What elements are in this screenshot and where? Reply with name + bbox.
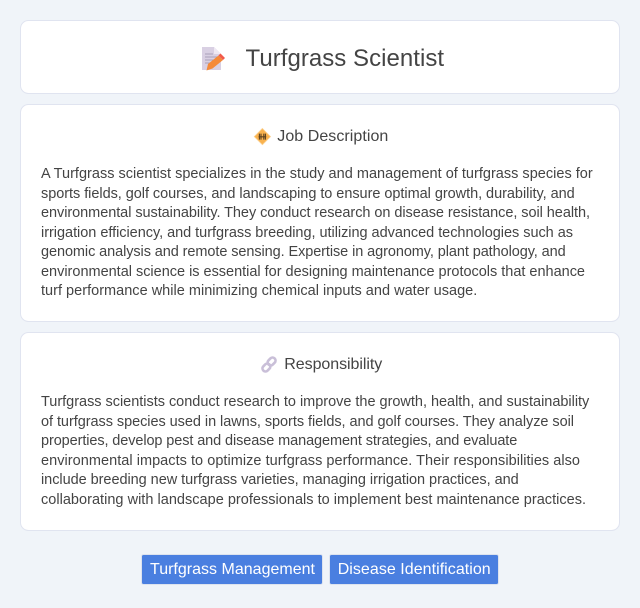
text block: responsibility: collaborating with landscape professionals to implement best maintenance practices. — [41, 492, 586, 508]
heading: job description: Job Description — [277, 128, 388, 145]
icon: diamond road sign — [254, 128, 270, 145]
text block: responsibility: properties, develop pest and disease management strategies, and evaluate — [41, 433, 517, 449]
title: Turfgrass Scientist — [246, 45, 444, 72]
text block: responsibility — [41, 394, 590, 508]
text block: responsibility: environmental impacts to optimize turfgrass performance. Their responsibilities also — [41, 453, 580, 469]
tag: turfgrass management: Turfgrass Management — [150, 561, 316, 578]
text block: job description: irrigation efficiency, and turfgrass breeding, utilizing advanced technologies such as — [41, 225, 573, 241]
tag: disease identification — [330, 554, 498, 584]
text block: job description: genomic analysis and remote sensing. Expertise in agronomy, plant pathology, and — [41, 244, 566, 260]
heading: responsibility: Responsibility — [284, 356, 382, 373]
text block: job description — [41, 166, 593, 299]
text block: job description: A Turfgrass scientist specializes in the study and management of turfgrass species for — [41, 166, 593, 182]
text block: job description: environmental sustainability. They conduct research on disease resistance, soil health, — [41, 205, 590, 221]
icon: chain link — [261, 356, 277, 373]
text block: responsibility: Turfgrass scientists conduct research to improve the growth, health, and sustainability — [41, 394, 590, 410]
panel: job description — [20, 104, 620, 322]
tag: turfgrass management — [142, 554, 322, 584]
panel: title card — [20, 20, 620, 94]
tag: disease identification: Disease Identification — [338, 561, 491, 578]
icon: document with pencil — [202, 47, 225, 70]
panel: responsibility — [20, 332, 620, 530]
text block: responsibility: of turfgrass species used in lawns, sports fields, and golf courses. They analyze soil — [41, 414, 574, 430]
text block: job description: environmental science is essential for designing maintenance protocols that enhance — [41, 264, 585, 280]
text block: job description: sports fields, golf courses, and landscaping to ensure optimal growth, durability, and — [41, 186, 575, 202]
text block: responsibility: include breeding new turfgrass varieties, managing irrigation practices, and — [41, 472, 519, 488]
text block: job description: turf performance while minimizing chemical inputs and water usage. — [41, 283, 477, 299]
